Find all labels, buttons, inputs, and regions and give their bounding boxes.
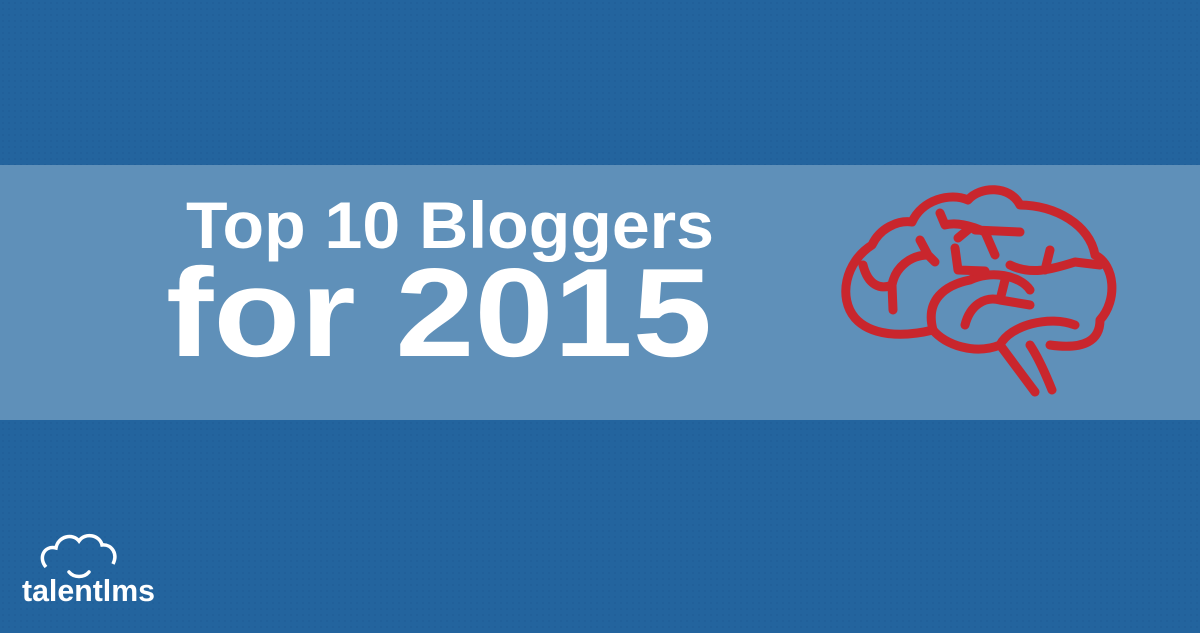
icon: brain <box>846 190 1112 392</box>
title: for 2015 <box>166 242 712 383</box>
title <box>166 188 714 383</box>
band <box>0 165 1200 420</box>
logo: talentlms <box>22 536 155 608</box>
logo: talentlms: talentlms <box>22 573 155 608</box>
title: Top 10 Bloggers <box>186 188 714 262</box>
